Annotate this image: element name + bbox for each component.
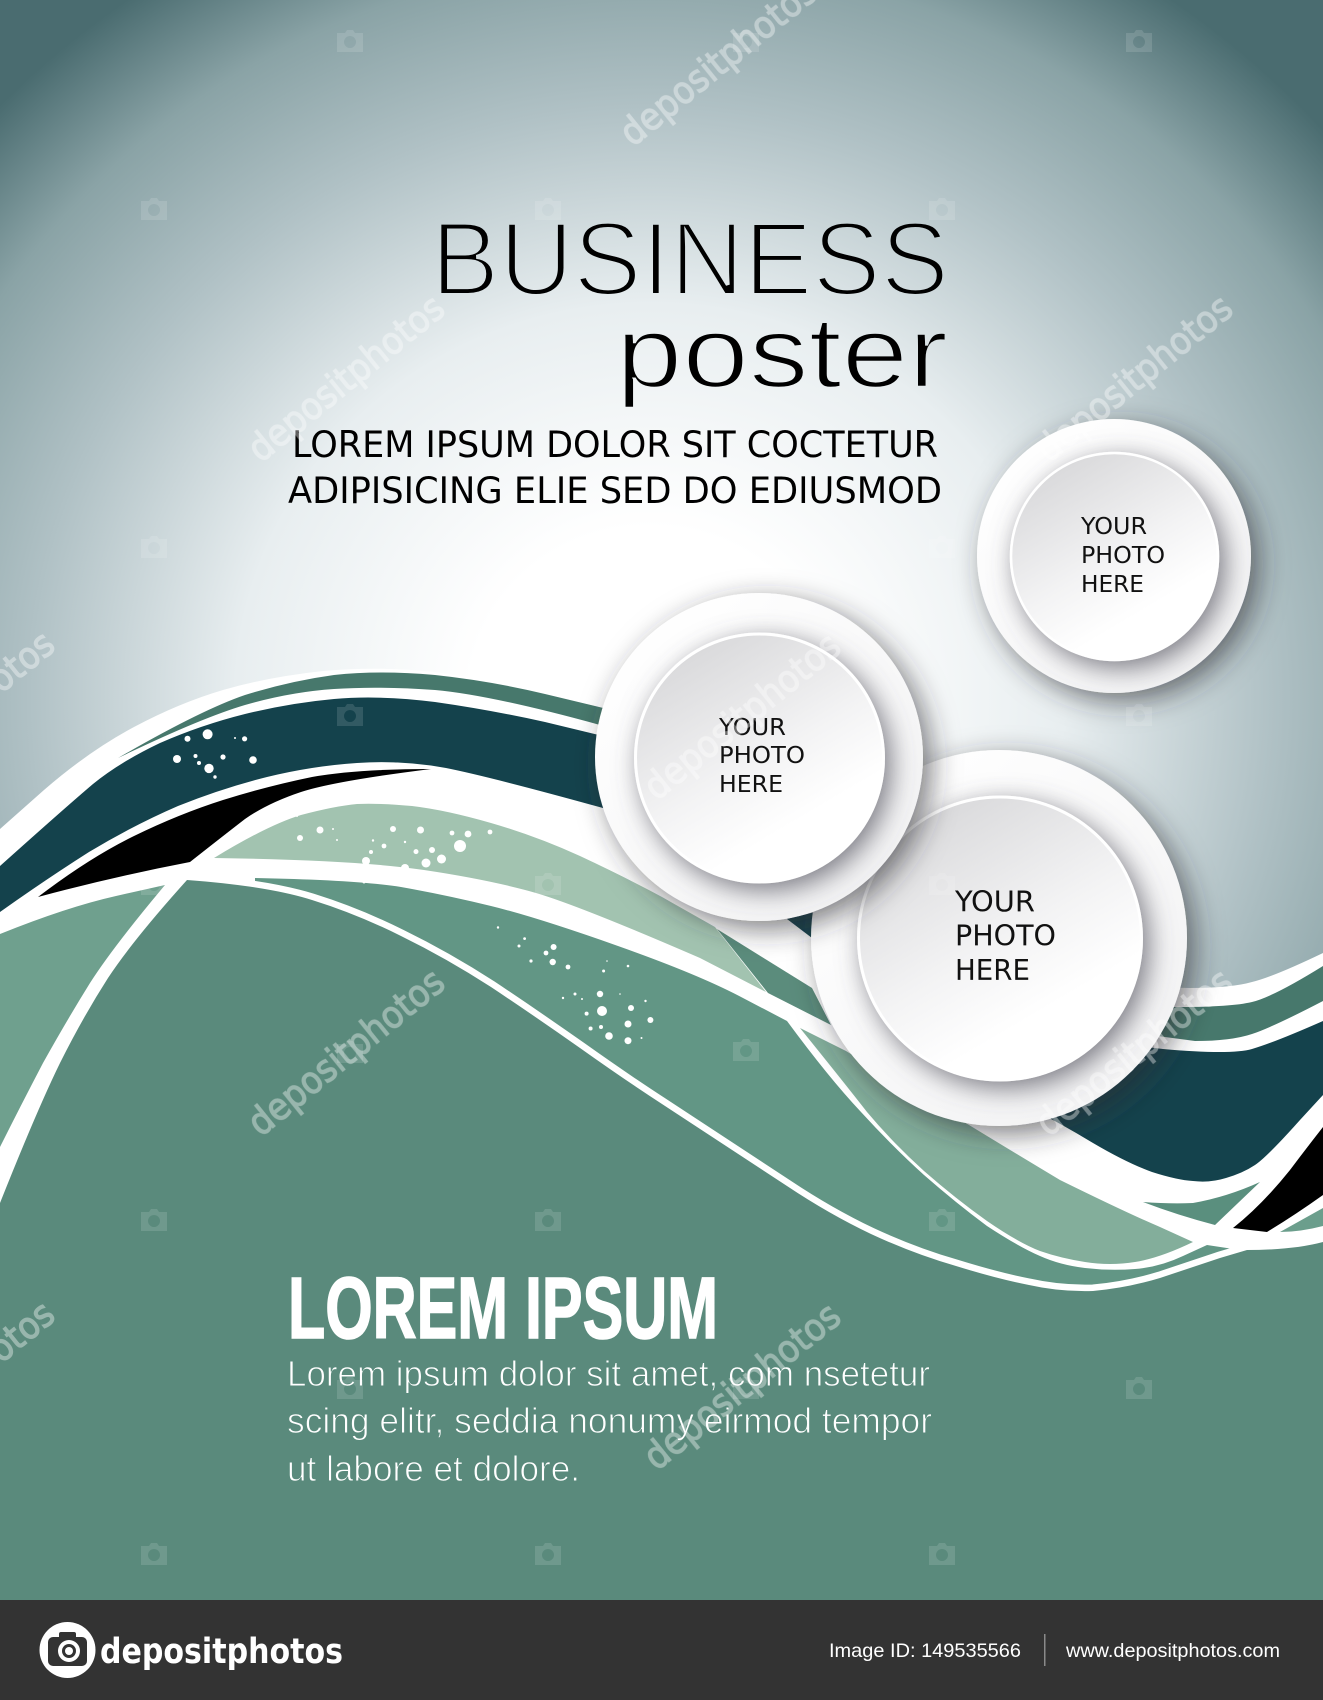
wave: light green ribbon (214, 804, 766, 992)
wave: green tip right (1280, 1208, 1323, 1232)
wave: navy ribbon right (1030, 1021, 1323, 1182)
photo circle: large bottom: PHOTO (955, 920, 1056, 952)
main green area (0, 880, 1323, 1600)
footer logo text: depositphotos (100, 1632, 343, 1672)
subtitle (288, 423, 942, 512)
wave: small green sliver (717, 929, 831, 1025)
title: BUSINESS (431, 201, 949, 318)
wave: white backing band (0, 669, 1323, 1600)
subtitle: ADIPISICING ELIE SED DO EDIUSMOD (288, 469, 942, 512)
body paragraph (287, 1353, 932, 1489)
icon: camera logo (40, 1622, 96, 1678)
wave: dark green ribbon left (118, 672, 620, 758)
watermark text: depositphotos (239, 960, 453, 1145)
photo circle: middle: YOUR (718, 715, 786, 741)
wave: pale green band (800, 1028, 1193, 1264)
watermark text: depositphotos (1027, 286, 1241, 471)
photo circle: large bottom: YOUR (954, 886, 1035, 918)
body paragraph: ut labore et dolore. (287, 1448, 580, 1489)
footer url: www.depositphotos.com (1065, 1640, 1280, 1662)
photo circle: large bottom (811, 750, 1187, 1126)
photo circle: middle: PHOTO (719, 743, 805, 769)
wave: dark green ribbon right (1150, 966, 1323, 1041)
splatter dots (173, 729, 653, 1044)
wave: mid green band (255, 878, 1240, 1320)
photo circle: top right: YOUR (1080, 514, 1147, 540)
wave: black ribbon left (38, 769, 431, 897)
footer bar (0, 1600, 1323, 1700)
title: poster (616, 297, 948, 409)
body paragraph: Lorem ipsum dolor sit amet, com nsetetur (287, 1353, 930, 1394)
watermark text: depositphotos (635, 624, 849, 809)
photo circle: middle: HERE (719, 772, 783, 798)
wave: left green wedge (0, 885, 165, 1147)
photo circle: top right: PHOTO (1081, 543, 1165, 569)
image id: Image ID: 149535566 (829, 1640, 1021, 1662)
subtitle: LOREM IPSUM DOLOR SIT COCTETUR (292, 423, 938, 466)
wave: black ribbon right (1233, 1127, 1323, 1232)
wave: small green piece right (1143, 1182, 1260, 1225)
wave: small navy sliver (787, 912, 815, 938)
watermark text: depositphotos (1027, 960, 1241, 1145)
photo circle: top right (977, 419, 1251, 693)
photo circle: large bottom: HERE (955, 954, 1030, 987)
title (431, 201, 949, 409)
body paragraph: scing elitr, seddia nonumy eirmod tempor (287, 1400, 932, 1441)
watermark text: depositphotos (635, 1294, 849, 1479)
heading: lorem ipsum: LOREM IPSUM (288, 1260, 718, 1357)
footer separator (1044, 1634, 1046, 1666)
photo circle: top right: HERE (1081, 572, 1144, 598)
photo circle: middle (595, 593, 923, 921)
watermark text: depositphotos (239, 286, 453, 471)
wave: navy ribbon left (0, 698, 640, 912)
watermark camera icons (141, 30, 1152, 1565)
